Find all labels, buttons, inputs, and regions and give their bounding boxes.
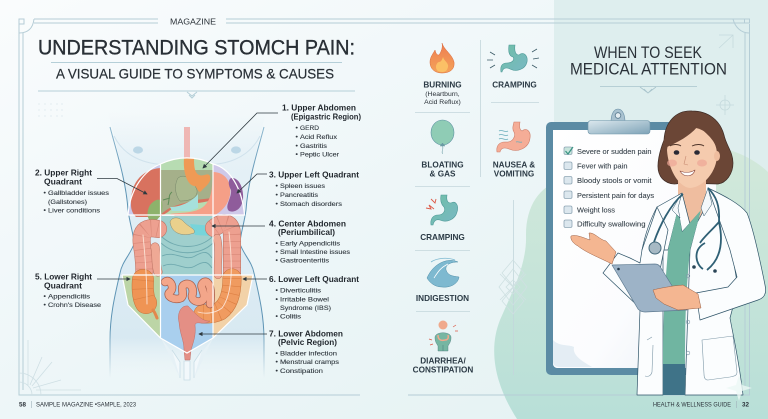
esophagus [184, 127, 190, 165]
label 4: center abdomen: Early Appendicitis [280, 240, 341, 248]
liver [131, 168, 213, 217]
label 5: lower right quadrant: Appendicitis [48, 294, 91, 300]
label 7: lower abdomen: 7. Lower Abdomen [269, 330, 343, 338]
cramping label: CRAMPING [492, 80, 537, 90]
nausea label: VOMITING [494, 170, 534, 178]
icon: wave [427, 258, 459, 287]
label 5: lower right quadrant: 5. Lower Right [35, 272, 92, 282]
checklist: Weight loss [577, 206, 615, 214]
callout arrows [97, 113, 278, 334]
icon: cramping stomach [487, 45, 539, 72]
icon: person with stomach ache [429, 320, 458, 351]
mid region fills [160, 216, 213, 275]
label 4: center abdomen: • [276, 258, 278, 264]
footer right [653, 401, 750, 408]
label 3: upper left quadrant: 3. Upper Left Quadrant [269, 171, 359, 180]
label 3: upper left quadrant: • [276, 183, 278, 190]
label 5: lower right quadrant: • [44, 302, 46, 309]
decorative lattice [499, 260, 527, 314]
footer left: SAMPLE, 2023 [97, 402, 137, 408]
label 5: lower right quadrant: Crohn's Disease [48, 302, 101, 309]
footer right: HEALTH & WELLNESS GUIDE [653, 402, 731, 408]
label 1: upper abdomen: Peptic Ulcer [300, 152, 340, 158]
label 2: upper right quadrant: • [44, 190, 46, 197]
label 5: lower right quadrant [35, 272, 101, 309]
subtitle: A VISUAL GUIDE TO SYMPTOMS & CAUSES [56, 66, 334, 82]
bloating label: & GAS [430, 170, 456, 178]
facial features [667, 144, 707, 176]
label 6: lower left quadrant: Syndrome (IBS) [280, 305, 331, 312]
stethoscope [654, 188, 721, 270]
heading divider with chevron [600, 86, 697, 93]
checklist: Bloody stools or vomit [577, 176, 652, 185]
label 6: lower left quadrant: • [276, 314, 278, 320]
face [667, 128, 717, 188]
pancreas [170, 218, 194, 235]
magazine label: MAGAZINE [170, 16, 216, 26]
icon: balloon [431, 120, 454, 154]
label 2: upper right quadrant: (Gallstones) [48, 199, 87, 206]
bloating label [421, 160, 464, 178]
label 1: upper abdomen: • [296, 125, 298, 132]
label 1: upper abdomen: • [296, 134, 298, 141]
indigestion label: INDIGESTION [416, 294, 469, 303]
green blob [494, 145, 768, 419]
when to seek heading: MEDICAL ATTENTION [570, 60, 727, 78]
footer left: 58 [19, 402, 27, 408]
label 1: upper abdomen: • [296, 152, 298, 158]
label 1: upper abdomen: • [296, 143, 298, 150]
buttons and pockets [645, 274, 737, 380]
label 6: lower left quadrant: 6. Lower Left Quadrant [269, 275, 359, 284]
label 5: lower right quadrant: • [44, 294, 46, 300]
label 2: upper right quadrant: Liver conditions [48, 208, 101, 214]
checklist: Fever with pain [577, 162, 628, 170]
scrubs [663, 208, 701, 365]
rectum [178, 306, 210, 360]
clip [611, 109, 625, 122]
decorative sunburst [19, 340, 81, 395]
coat body [637, 188, 743, 395]
diarrhea label: CONSTIPATION [413, 366, 473, 374]
ear [714, 151, 720, 161]
label 5: lower right quadrant: Quadrant [44, 282, 82, 290]
large intestine [142, 223, 232, 318]
decorative star [726, 375, 752, 401]
label 4: center abdomen: Gastroenteritis [280, 258, 330, 264]
title: UNDERSTANDING STOMCH PAIN: [38, 36, 355, 60]
decorative dots [38, 103, 63, 117]
diarrhea label: DIARRHEA/ [420, 356, 466, 366]
label 7: lower abdomen [269, 330, 343, 375]
right sleeve [696, 188, 766, 320]
label 7: lower abdomen: • [276, 359, 278, 366]
label 6: lower left quadrant: • [276, 288, 278, 294]
burning label: BURNING [423, 80, 462, 90]
footer left [19, 401, 137, 408]
upper region fills [128, 164, 160, 215]
label 3: upper left quadrant: Stomach disorders [280, 201, 343, 208]
label 7: lower abdomen: • [276, 350, 278, 358]
small intestine lower [165, 281, 211, 304]
label 6: lower left quadrant: Diverticulitis [280, 288, 322, 294]
checklist: Difficulty swallowing [577, 220, 646, 228]
symptom dividers [415, 40, 539, 375]
label 3: upper left quadrant: • [276, 192, 278, 199]
burning label: Acid Reflux) [424, 99, 461, 106]
torso [108, 112, 266, 378]
hair back [658, 111, 733, 184]
label 4: center abdomen: • [276, 249, 278, 256]
diarrhea label [413, 356, 473, 374]
right panel tint [554, 0, 768, 419]
label 4: center abdomen: • [276, 240, 278, 248]
icon: cramping stomach with pain bolt [426, 195, 458, 225]
label 2: upper right quadrant: 2. Upper Right [35, 169, 92, 178]
small intestine teal [161, 236, 213, 268]
label 1: upper abdomen: 1. Upper Abdomen [282, 104, 356, 113]
label 2: upper right quadrant: • [44, 208, 46, 214]
left sleeve [603, 207, 668, 310]
label 4: center abdomen [269, 220, 351, 264]
label 7: lower abdomen: Constipation [280, 368, 323, 375]
label 6: lower left quadrant: • [276, 296, 278, 304]
label 1: upper abdomen: Acid Reflux [300, 134, 338, 141]
label 6: lower left quadrant: Colitis [280, 314, 302, 320]
spleen [227, 178, 243, 212]
tablet [612, 264, 687, 312]
hair fringe [662, 113, 722, 162]
anatomy figure [108, 112, 266, 380]
lower region fills [122, 275, 160, 338]
label 1: upper abdomen [282, 104, 361, 158]
label 4: center abdomen: 4. Center Abdomen [269, 220, 346, 228]
cramping label left: CRAMPING [420, 233, 465, 242]
checklist: Persistent pain for days [577, 191, 654, 200]
doctor [571, 111, 766, 395]
when to seek heading [570, 44, 727, 78]
footer right: 32 [742, 402, 750, 408]
stomach upper orange [184, 158, 210, 192]
stomach [170, 172, 230, 220]
page curl [553, 340, 592, 367]
label 7: lower abdomen: • [276, 368, 278, 375]
label 7: lower abdomen: Bladder infection [280, 350, 337, 358]
icon: nausea stomach [497, 122, 530, 152]
gallbladder [148, 200, 162, 222]
nausea label: NAUSEA & [493, 160, 535, 170]
label 3: upper left quadrant: Spleen issues [280, 183, 326, 190]
coat collar [672, 188, 712, 218]
label 6: lower left quadrant: Irritable Bowel [280, 296, 330, 304]
footer left: SAMPLE MAGAZINE • [36, 402, 97, 408]
label 3: upper left quadrant [269, 171, 359, 208]
neck [672, 178, 712, 232]
label 1: upper abdomen: (Epigastric Region) [291, 112, 361, 122]
label 6: lower left quadrant [269, 275, 359, 320]
raised hand [571, 233, 616, 264]
clipboard [546, 109, 716, 375]
label 2: upper right quadrant: Quadrant [44, 178, 82, 186]
quadrant grid lines [122, 158, 253, 353]
label 3: upper left quadrant: • [276, 201, 278, 208]
label 3: upper left quadrant: Pancreatitis [280, 192, 319, 199]
heading divider with chevron [38, 91, 355, 98]
checklist: Severe or sudden pain [577, 147, 652, 156]
label 4: center abdomen: (Periumbilical) [278, 228, 335, 237]
burning label: (Heartburn, [425, 91, 460, 98]
bloating label: BLOATING [421, 160, 464, 170]
label 1: upper abdomen: Gastritis [300, 143, 328, 150]
label 1: upper abdomen: GERD [300, 125, 319, 132]
chestpiece and earpieces [649, 242, 661, 254]
burning label [423, 80, 462, 106]
tablet hand [653, 285, 701, 310]
label 4: center abdomen: Small Intestine issues [280, 249, 351, 256]
label 2: upper right quadrant: Gallbladder issues [48, 190, 110, 197]
label 2: upper right quadrant [35, 169, 110, 214]
label 7: lower abdomen: (Pelvic Region) [278, 338, 337, 347]
checklist [564, 147, 654, 228]
decorative arrow and crosshair [716, 35, 734, 115]
label 7: lower abdomen: Menstrual cramps [280, 359, 340, 366]
nausea label [493, 160, 535, 178]
when to seek heading: WHEN TO SEEK [594, 44, 702, 62]
icon: flame [430, 43, 454, 73]
